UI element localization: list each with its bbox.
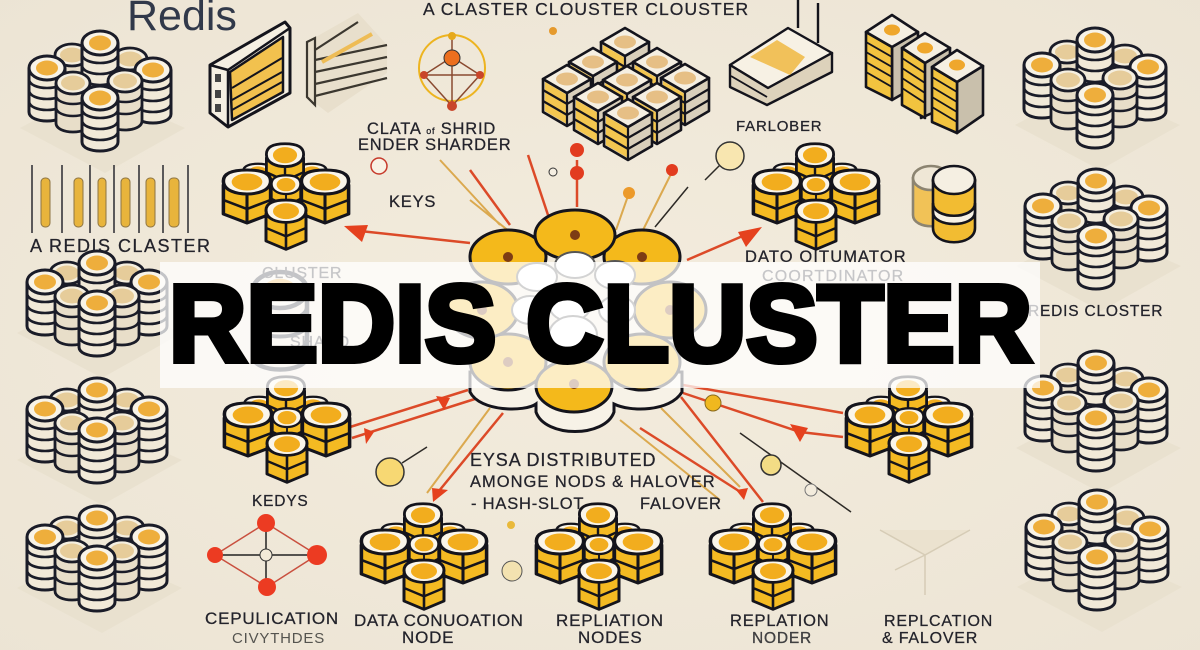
label: failover: FARLOBER [736,118,822,135]
icon: network shard [419,32,485,111]
icon: stack cluster right bottom [1017,490,1182,632]
faded cylinder behind band [253,272,307,370]
label: replication failover: & FALOVER [882,630,978,647]
node: top dot [549,168,557,176]
arrows: lower left [350,390,478,444]
icon: server left [210,22,290,127]
node: bottom ring [502,561,522,581]
text: distributed: FALOVER [640,495,722,513]
label: faded shard: SHARD [290,334,350,351]
icon: stack cluster right lower [1016,351,1181,493]
label: shard: ENDER SHARDER [358,136,511,154]
label: replication failover: REPLCATION [884,613,993,630]
label: a redis cluster: A REDIS CLASTER [30,236,212,256]
icon: yellow cluster bottom 2 [536,504,662,609]
icon: database [913,166,975,242]
label: replication overrides: CIVYTHDES [232,630,325,647]
label: replation noder: NODER [752,630,812,647]
tower 1 [866,15,918,100]
icon: stack cluster left bottom [17,506,182,633]
icon: faded server [307,13,387,113]
label: shard [358,120,511,154]
icon: stack cluster left lower [17,378,182,505]
icon: yellow cluster lower left [224,377,350,482]
label: replation noder [730,612,830,647]
arrow: left upper [344,225,470,243]
faint diagram [880,530,970,595]
label: keys: KEYS [389,193,436,211]
icon: stack cluster top right [1015,28,1180,170]
arrows: spokes from centre [17,142,1182,647]
label: shard: CLATA of SHRID [367,120,496,138]
back cylinder [913,166,950,226]
label: replation noder: REPLATION [730,612,830,630]
node: bottom small [507,521,515,529]
front cylinder [933,166,975,242]
label: faded cluster: CLUSTER [262,265,342,282]
arrow: to bottom node [427,408,503,502]
icon: stack cluster left [17,251,182,378]
icon: yellow cluster upper right [753,144,879,249]
text: distributed: AMONGE NODS & HALOVER [470,473,716,491]
text: distributed [470,450,722,513]
node: keys pin [371,158,387,174]
label: data node: NODE [402,628,454,647]
label: data node [354,611,524,647]
label: replication nodes [556,611,664,647]
icon: yellow cluster upper left [223,144,349,249]
icon: box cluster top centre [543,28,709,160]
node: lower right pin [740,433,851,512]
label: coordinator 2: COORTDINATOR [762,268,904,285]
label: keys lower: KEDYS [252,493,309,510]
node: right pin [716,142,744,170]
arrows: lower right [683,385,843,442]
label: replication overrides: CEPULICATION [205,609,339,628]
dot: orange [549,27,557,35]
icon: server towers [866,15,983,133]
label: replication nodes: REPLIATION [556,611,664,630]
icon: red network [207,514,327,596]
icon: stack cluster right [1016,169,1181,311]
label: replication failover [882,613,993,647]
label: replication nodes: NODES [578,628,642,647]
bars: sharding [32,165,188,233]
icon: yellow cluster bottom 3 [710,504,836,609]
tower 2 [902,33,950,118]
label: coordinator: DATO OITUMATOR [745,248,907,266]
label: data node: DATA CONUOATION [354,611,524,630]
icon: yellow cluster bottom 1 [361,504,487,609]
label: replication overrides [205,609,339,647]
arrow: right upper [687,227,762,260]
icon: router [730,0,832,105]
text: distributed: EYSA DISTRIBUTED [470,450,656,470]
arrows: fan to replication [620,397,763,502]
title: REDIS CLUSTER [169,263,1032,385]
icon: yellow cluster lower right [846,377,972,482]
node: lower left pin [376,447,427,486]
central hub [446,210,706,432]
icon: stack cluster top left [20,31,185,173]
label: redis cluster right: REDIS CLOSTER [1028,303,1163,320]
title band [160,262,1040,388]
text: distributed: - HASH-SLOT [471,495,584,513]
tower 3 [932,50,983,133]
